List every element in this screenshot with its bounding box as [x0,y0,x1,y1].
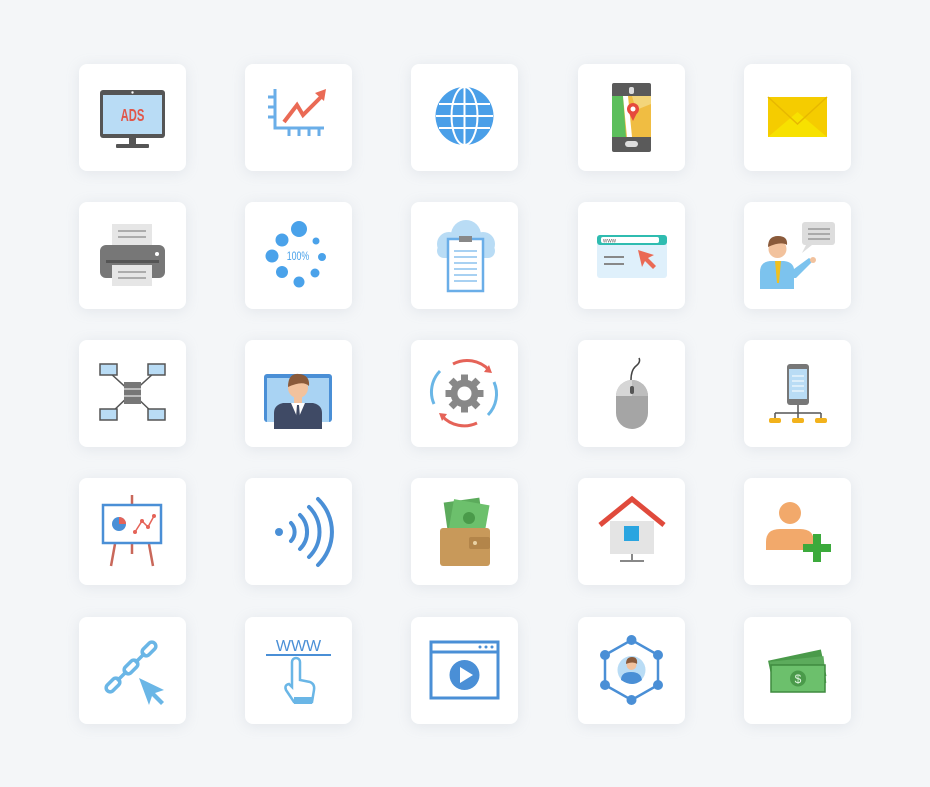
card: man with speech bubble [744,202,851,309]
card: money stack [744,617,851,724]
card: chain link cursor [79,617,186,724]
card: phone map [578,64,685,171]
card: www browser click: www [602,238,617,244]
card: money stack: $ [795,672,802,686]
card: printer [79,202,186,309]
card: gear with arrows [411,340,518,447]
card: phone hierarchy [744,340,851,447]
card: cloud clipboard [411,202,518,309]
card: ads monitor [79,64,186,171]
card: globe [411,64,518,171]
card: mouse [578,340,685,447]
card: www browser click [578,202,685,309]
card: ads monitor: ADS [121,107,145,126]
card: www hand [245,617,352,724]
card: wallet with money [411,478,518,585]
card: nfc waves [245,478,352,585]
card: businessman monitor [245,340,352,447]
card: easel presentation [79,478,186,585]
card: network hub [79,340,186,447]
card: growth chart [245,64,352,171]
card: loading 100% [245,202,352,309]
card: loading 100%: 100% [287,250,310,263]
card: add user [744,478,851,585]
card: www hand: WWW [276,638,322,655]
card: home network [578,478,685,585]
card: envelope [744,64,851,171]
card: hexagon network person [578,617,685,724]
card: video player [411,617,518,724]
